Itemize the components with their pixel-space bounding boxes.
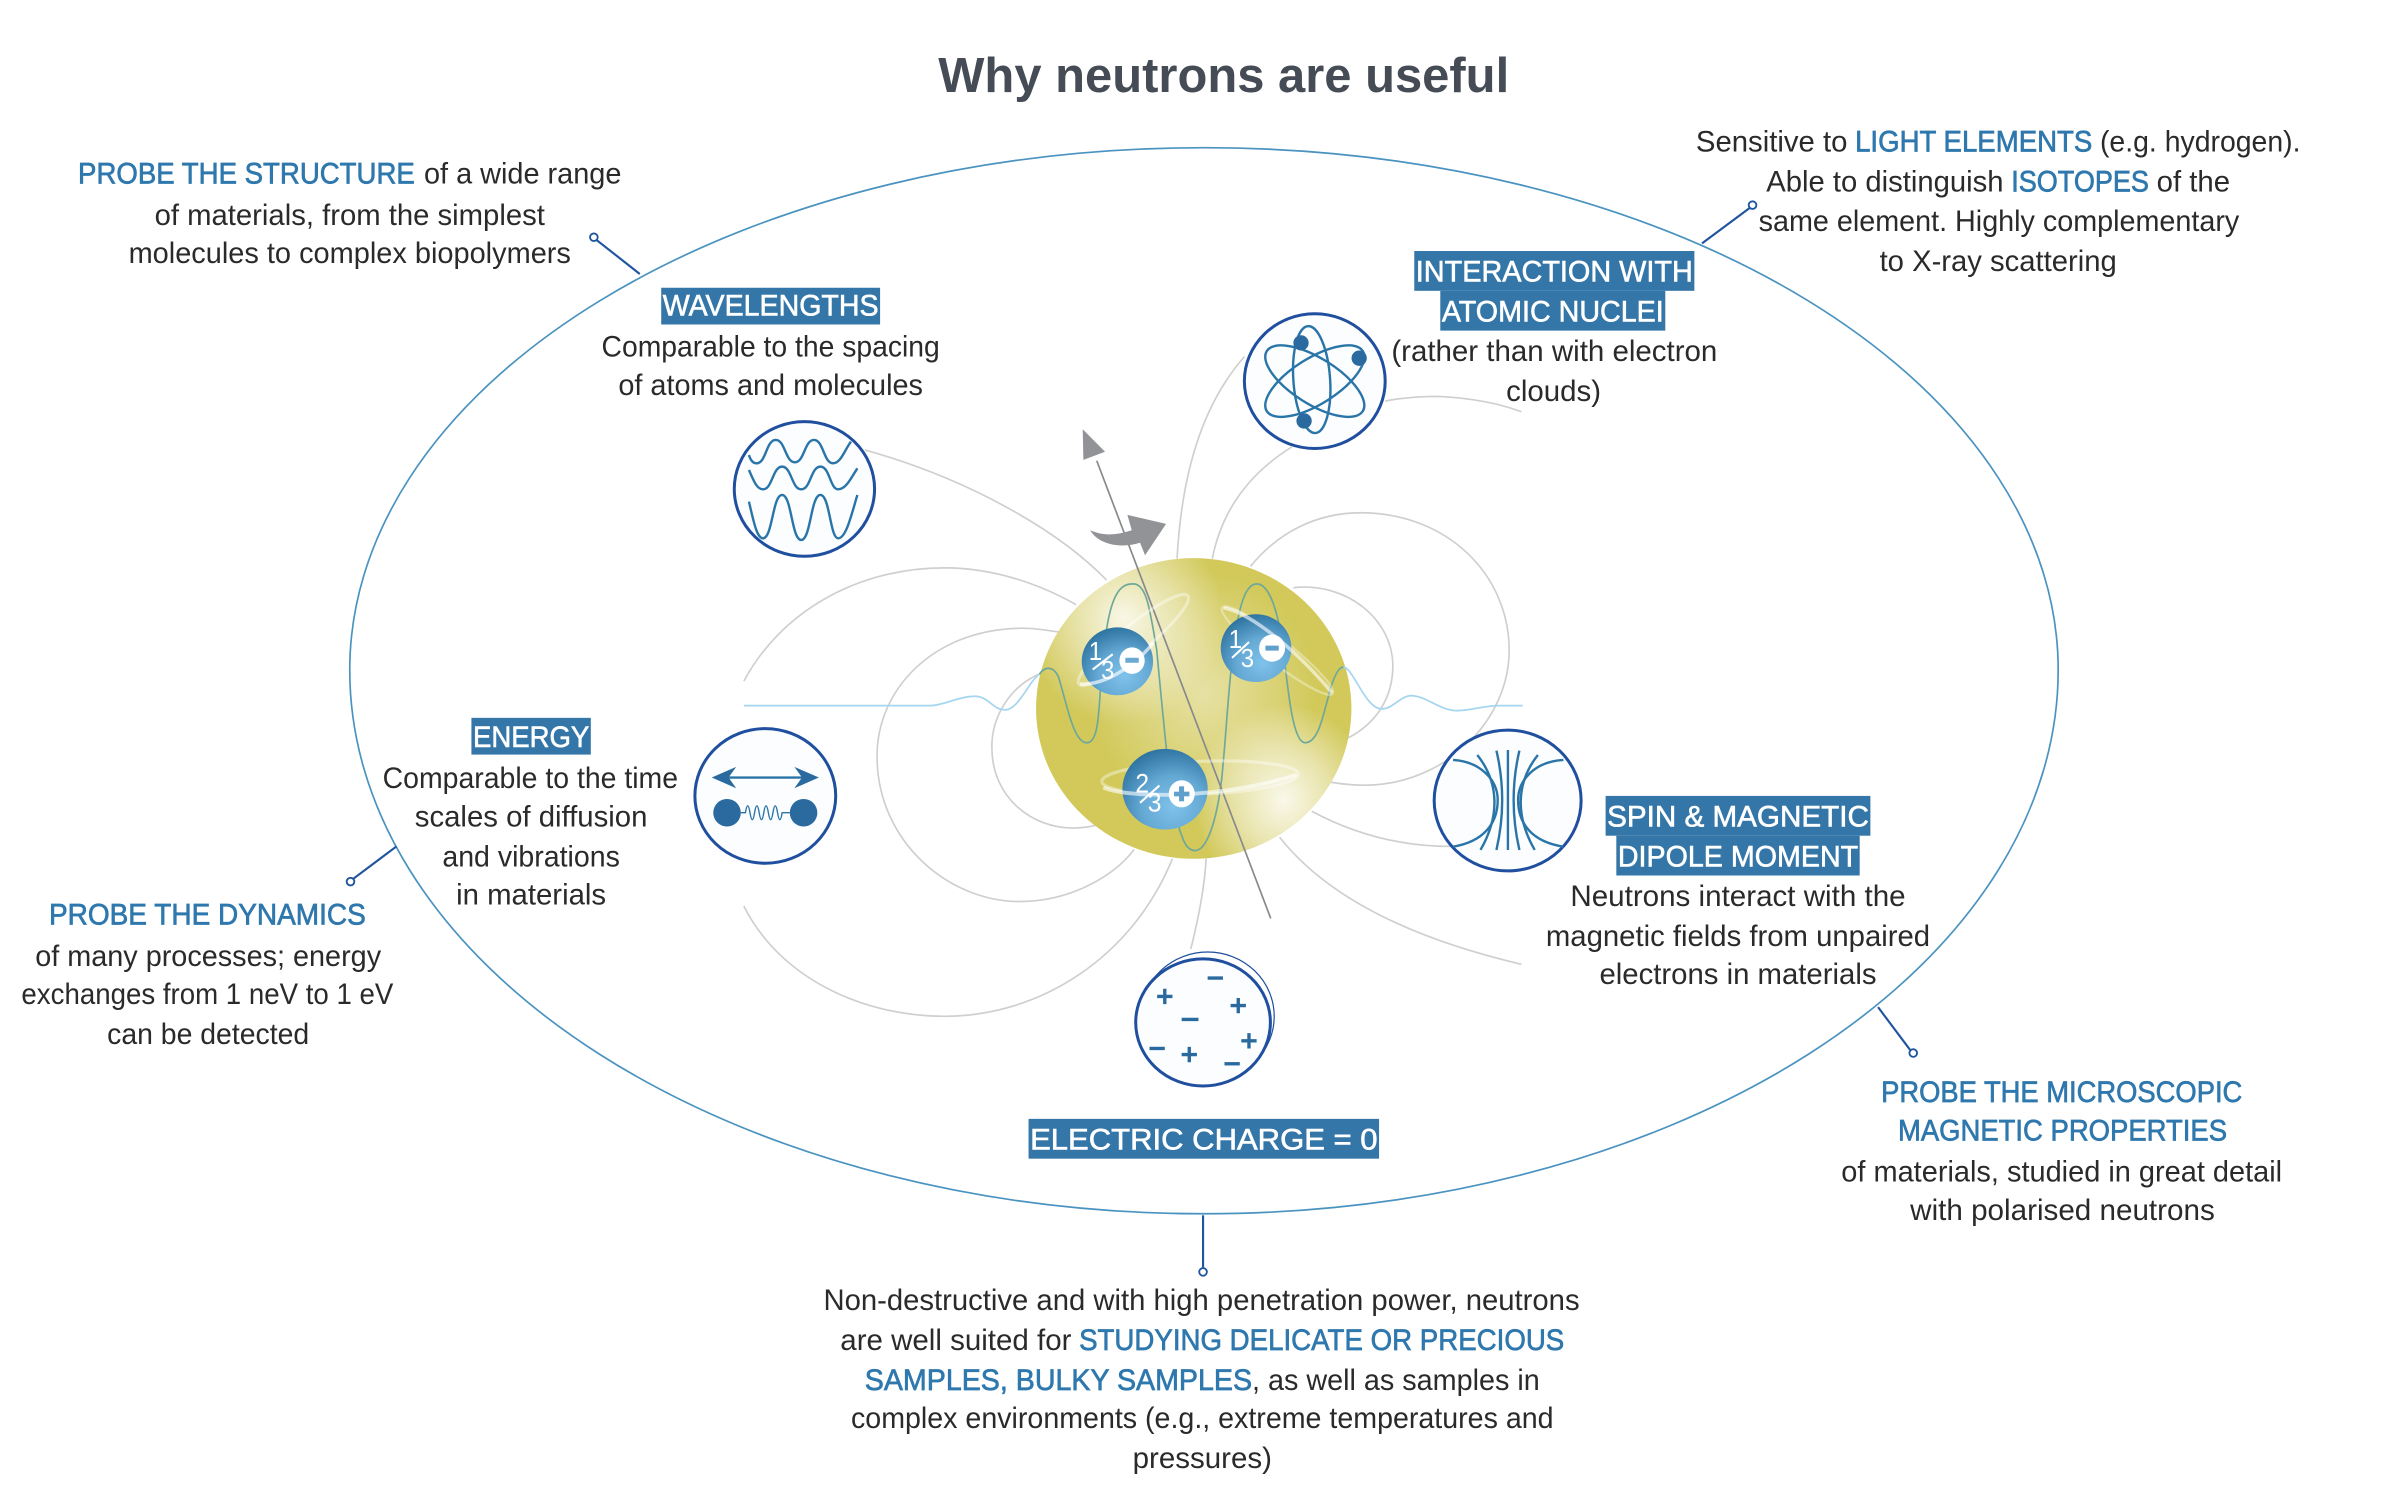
text: probe the dynamics: PROBE THE DYNAMICS <box>49 898 366 931</box>
callout connector: structure <box>590 233 640 274</box>
text: probe the structure: of a wide range <box>424 158 621 191</box>
text: probe the microscopic magnetic properties: of materials, studied in great detail <box>1841 1156 2282 1189</box>
panel: electric charge: ELECTRIC CHARGE = 0 <box>1030 1123 1378 1156</box>
text: light elements and isotopes: same element. Highly complementary <box>1759 205 2239 238</box>
quark 1/3 minus right <box>1215 598 1339 703</box>
title: Why neutrons are useful <box>938 49 1509 103</box>
text: probe the structure: molecules to complex biopolymers <box>129 237 571 270</box>
text: samples: , as well as samples in <box>1252 1364 1540 1397</box>
panel: energy <box>383 718 678 912</box>
panel: spin and magnetic dipole moment: Neutrons interact with the <box>1570 880 1906 913</box>
callout connector: dynamics <box>347 846 396 885</box>
icon: wavelengths <box>734 422 875 556</box>
neutron body <box>1036 558 1351 859</box>
text: light elements and isotopes: ISOTOPES <box>2011 165 2149 198</box>
text: light elements and isotopes: to X-ray scattering <box>1880 245 2117 278</box>
neutron <box>744 429 1523 918</box>
text: probe the dynamics: exchanges from 1 neV to 1 eV <box>21 978 393 1011</box>
text: light elements and isotopes: LIGHT ELEMENTS <box>1855 126 2092 159</box>
text: probe the structure: of materials, from the simplest <box>155 199 546 232</box>
panel: wavelengths: WAVELENGTHS <box>663 289 879 322</box>
text: samples: Non-destructive and with high penetration power, neutrons <box>823 1284 1580 1317</box>
spin axis arrow <box>1083 429 1271 918</box>
quark 1/3 minus left: 3 <box>1101 656 1114 685</box>
icon: atom <box>1244 314 1385 448</box>
outer ellipse <box>350 148 2058 1214</box>
text: light elements and isotopes: (e.g. hydrogen). <box>2100 126 2300 159</box>
panel: energy: scales of diffusion <box>415 801 647 834</box>
panel: interaction with atomic nuclei <box>1391 251 1717 408</box>
callout connector: light elements <box>1702 201 1756 243</box>
text: light elements and isotopes: of the <box>2157 165 2230 198</box>
text: light elements and isotopes: Able to distinguish <box>1766 165 2004 198</box>
panel: spin and magnetic dipole moment: DIPOLE MOMENT <box>1618 840 1858 873</box>
text: probe the dynamics: can be detected <box>107 1018 309 1051</box>
panel: interaction with atomic nuclei: ATOMIC NUCLEI <box>1442 295 1664 328</box>
text: samples: are well suited for <box>840 1324 1071 1357</box>
quark 2/3 plus <box>1101 749 1299 830</box>
panel: interaction with atomic nuclei: clouds) <box>1506 375 1601 408</box>
wave through neutron <box>744 584 1523 851</box>
panel: interaction with atomic nuclei: INTERACTION WITH <box>1416 256 1693 289</box>
text: probe the microscopic magnetic properties: MAGNETIC PROPERTIES <box>1898 1114 2227 1147</box>
panel: wavelengths <box>602 288 940 402</box>
callout connector: samples <box>1199 1215 1207 1276</box>
panel: energy: and vibrations <box>442 840 620 873</box>
icon: charges <box>1136 952 1274 1086</box>
panel: spin and magnetic dipole moment <box>1546 796 1930 991</box>
text: probe the structure <box>78 158 621 270</box>
panel: energy: in materials <box>456 879 606 912</box>
text: probe the structure: PROBE THE STRUCTURE <box>78 158 415 191</box>
callout connector: magnetic properties <box>1878 1007 1917 1057</box>
text: probe the microscopic magnetic properties <box>1841 1076 2282 1227</box>
quark 1/3 minus right: 3 <box>1241 644 1254 673</box>
icon: energy spring <box>695 729 836 863</box>
text: samples: SAMPLES, BULKY SAMPLES <box>865 1364 1252 1397</box>
text: samples: STUDYING DELICATE OR PRECIOUS <box>1079 1324 1564 1357</box>
text: samples: complex environments (e.g., extreme temperatures and <box>851 1402 1554 1435</box>
text: samples: pressures) <box>1133 1442 1272 1475</box>
text: light elements and isotopes: Sensitive to <box>1696 126 1847 159</box>
panel: wavelengths: Comparable to the spacing <box>602 331 940 364</box>
text: probe the microscopic magnetic properties: PROBE THE MICROSCOPIC <box>1881 1076 2242 1109</box>
panel: interaction with atomic nuclei: (rather than with electron <box>1391 335 1717 368</box>
text: samples <box>823 1284 1580 1475</box>
panel: spin and magnetic dipole moment: electrons in materials <box>1599 958 1877 991</box>
quark 1/3 minus right: 1 <box>1229 625 1242 654</box>
text: probe the dynamics <box>21 898 393 1051</box>
panel: wavelengths: of atoms and molecules <box>618 369 923 402</box>
panel: spin and magnetic dipole moment: magnetic fields from unpaired <box>1546 920 1930 953</box>
quark 2/3 plus: 3 <box>1148 789 1161 818</box>
quark 1/3 minus left: 1 <box>1089 637 1102 666</box>
panel: energy: Comparable to the time <box>383 762 678 795</box>
quark 2/3 plus: 2 <box>1135 770 1149 799</box>
magnetic field lines <box>744 357 1521 1016</box>
text: probe the microscopic magnetic properties: with polarised neutrons <box>1909 1194 2215 1227</box>
text: probe the dynamics: of many processes; energy <box>35 940 381 973</box>
panel: energy: ENERGY <box>473 721 589 754</box>
icon: magnetic field <box>1434 730 1581 871</box>
quark 1/3 minus left <box>1071 584 1196 695</box>
panel: spin and magnetic dipole moment: SPIN & MAGNETIC <box>1607 801 1869 834</box>
text: light elements and isotopes <box>1696 126 2300 278</box>
